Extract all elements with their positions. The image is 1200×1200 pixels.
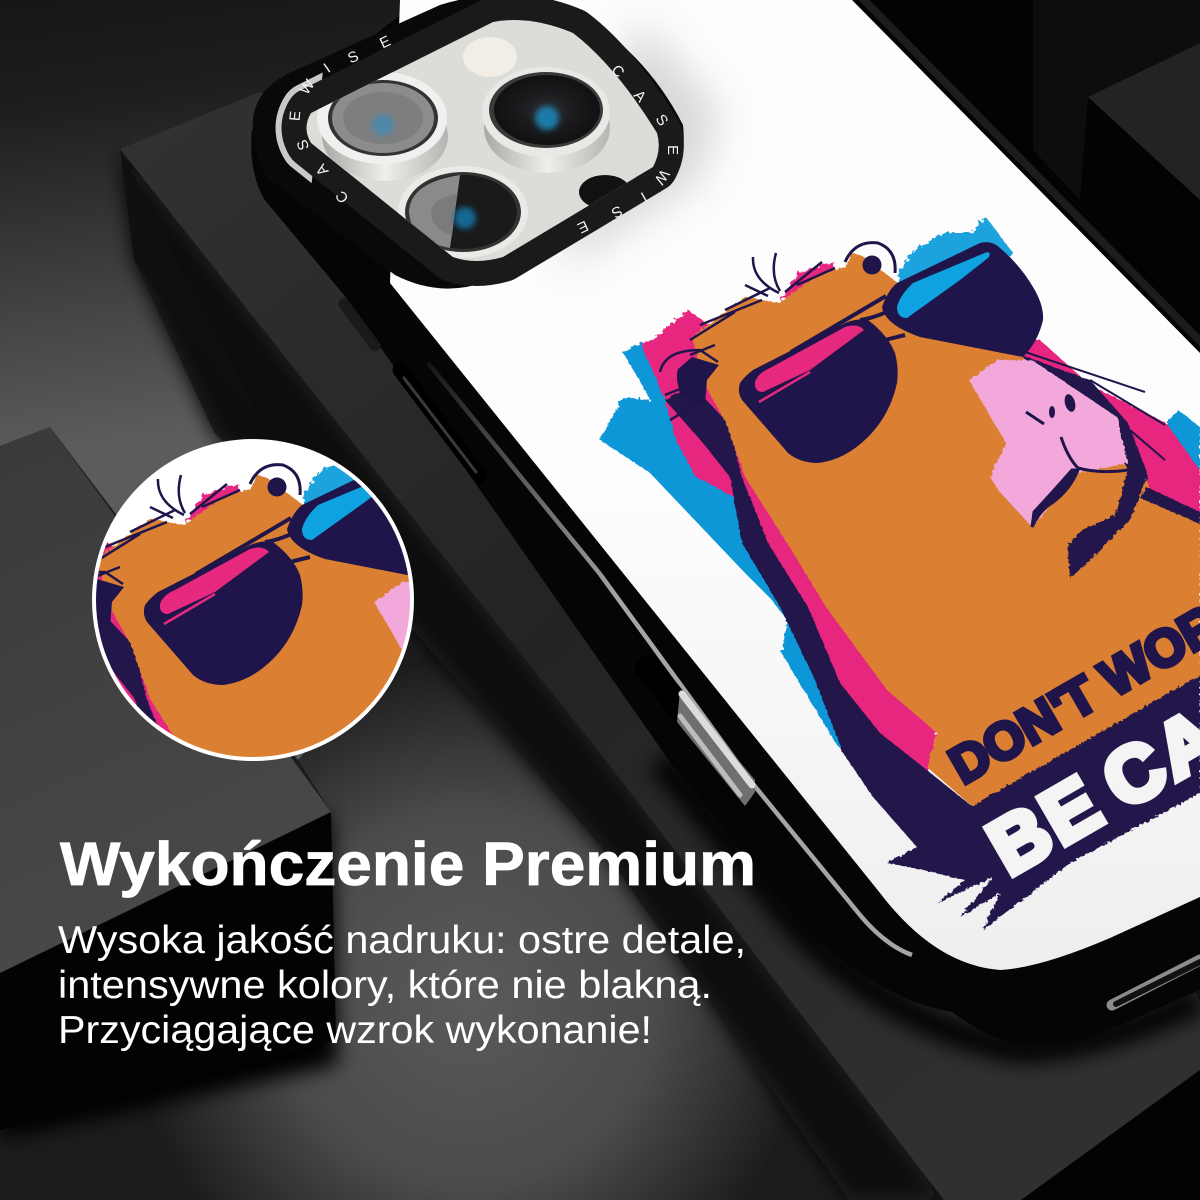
sunglasses: left lens <box>739 319 898 463</box>
microphone hole <box>579 175 627 206</box>
title: Wykończenie Premium <box>60 830 756 898</box>
top eye <box>845 243 895 285</box>
CASEWISE ring text: S <box>345 48 361 67</box>
CASEWISE ring text: S <box>294 137 313 152</box>
sunglasses: right lens <box>882 242 1043 357</box>
camera module <box>253 0 684 289</box>
description text: intensywne kolory, które nie blakną. <box>58 964 712 1007</box>
CASEWISE ring text: S <box>652 111 671 129</box>
CASEWISE ring text: C <box>608 62 628 81</box>
artwork: capybara with sunglasses <box>600 217 1200 930</box>
silver edge highlight <box>428 363 912 955</box>
ring band <box>306 20 659 261</box>
whiskers <box>1025 352 1165 460</box>
navy fur right side <box>1021 355 1148 578</box>
charging port <box>1112 960 1200 1005</box>
fur strokes on head <box>665 288 770 420</box>
CASEWISE ring text: I <box>638 188 650 205</box>
left ear <box>660 350 719 405</box>
CASEWISE ring text: W <box>296 76 319 98</box>
CASEWISE ring text: E <box>377 33 393 52</box>
blue brush strokes <box>599 342 842 749</box>
CASEWISE ring text: E <box>664 145 681 155</box>
lens 2 <box>482 67 610 173</box>
camera shadow on the back <box>560 20 720 270</box>
CASEWISE ring text: A <box>313 161 332 179</box>
zoom callout circle <box>92 439 414 761</box>
side button: silver power <box>648 668 755 806</box>
lens 1 <box>317 72 448 181</box>
phone case body <box>251 0 1200 1050</box>
sunglasses arm and bridge <box>791 296 905 352</box>
magenta brush strokes <box>642 310 937 777</box>
orange body <box>692 253 1200 807</box>
description text: Wysoka jakość nadruku: ostre detale, <box>58 919 746 962</box>
CASEWISE ring text: I <box>321 60 334 77</box>
eyelashes <box>745 253 835 296</box>
flash <box>463 37 517 77</box>
navy fur outline <box>665 385 1000 862</box>
pink muzzle <box>969 360 1128 527</box>
nose and mouth <box>1026 393 1128 527</box>
phone screen white back <box>390 0 1200 970</box>
lens 3 <box>398 166 528 258</box>
side button: switch <box>344 304 375 346</box>
CASEWISE ring text: E <box>287 110 304 122</box>
screen edge rim <box>858 0 1200 347</box>
description text <box>58 919 746 1052</box>
CASEWISE ring text: A <box>630 87 649 106</box>
description text: Przyciągające wzrok wykonanie! <box>58 1009 652 1052</box>
CASEWISE ring text: W <box>650 166 673 188</box>
side button: volume <box>400 370 480 476</box>
CASEWISE ring text: C <box>332 187 352 206</box>
CASEWISE ring text <box>287 33 681 236</box>
CASEWISE ring text: S <box>608 202 625 221</box>
CASEWISE ring text: E <box>575 217 591 236</box>
navy banner behind BE CA <box>887 675 1200 930</box>
grey gap between frame and ring <box>276 72 323 184</box>
camera window <box>306 20 659 261</box>
